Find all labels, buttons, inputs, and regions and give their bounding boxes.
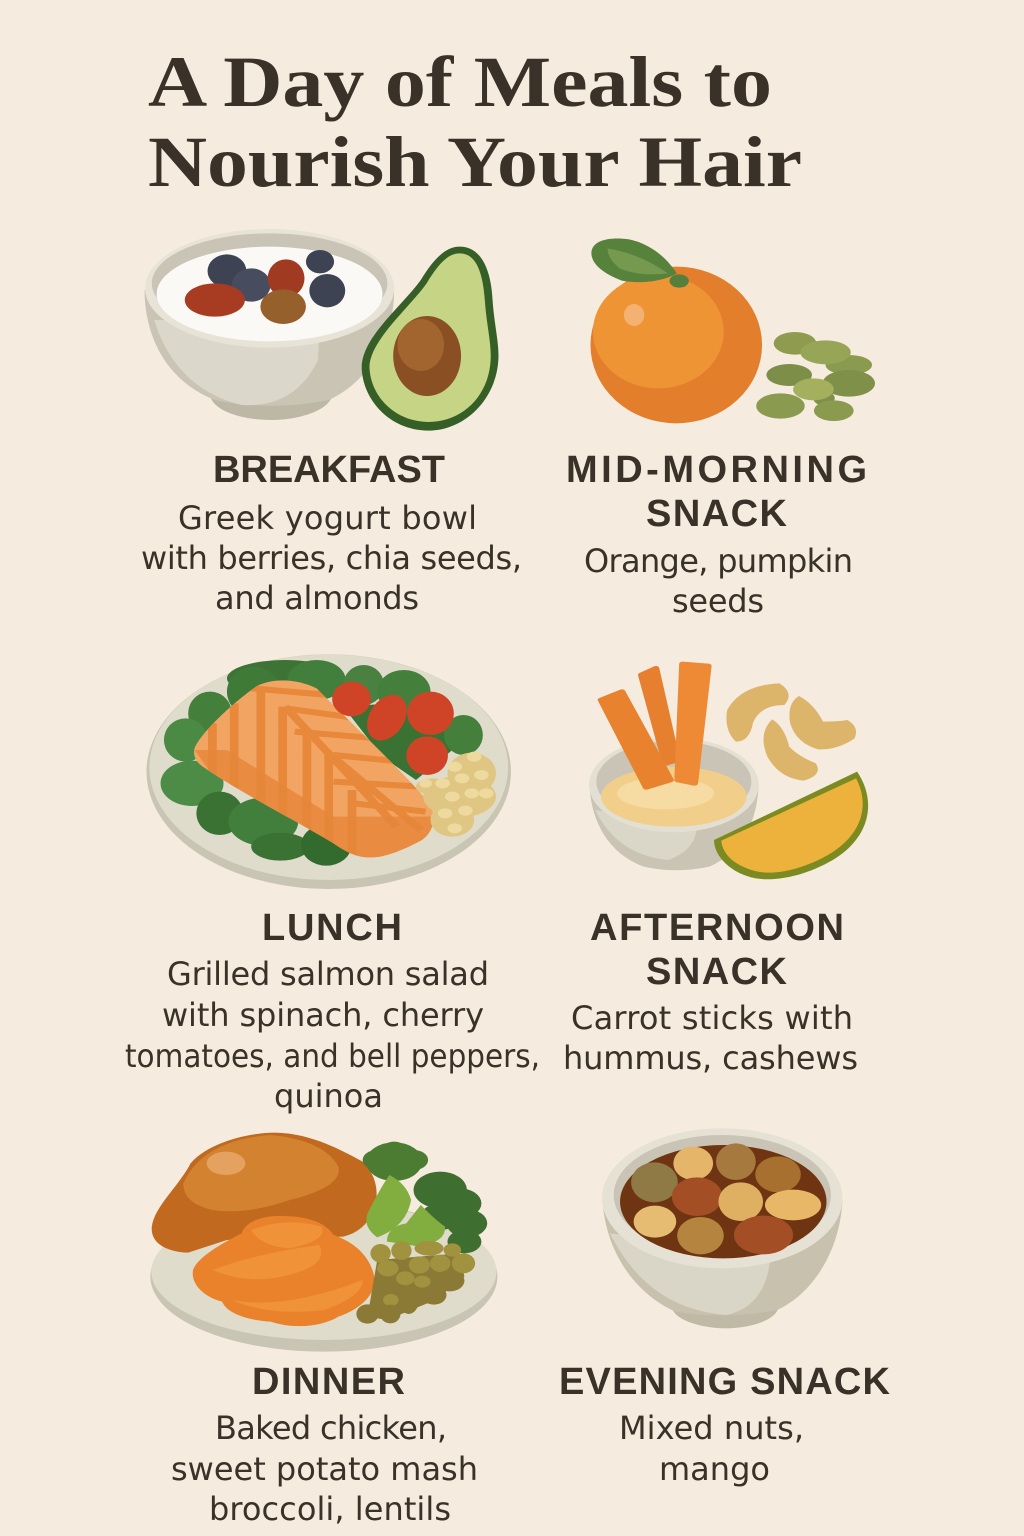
hummus bowl	[589, 738, 759, 870]
plate	[150, 1202, 497, 1352]
lentils	[356, 1241, 475, 1324]
panel: lunch text	[125, 907, 540, 1115]
tomatoes	[332, 682, 454, 775]
nut bowl	[602, 1128, 843, 1328]
panel: lunch text: LUNCH	[262, 907, 402, 949]
panel: breakfast text	[141, 449, 522, 617]
carrot sticks	[601, 664, 708, 787]
nuts	[631, 1143, 821, 1254]
panel: evening snack text: EVENING SNACK	[559, 1361, 891, 1403]
panel: afternoon snack text: SNACK	[646, 951, 788, 993]
panel: afternoon snack text: Carrot sticks with	[571, 999, 853, 1037]
panel: evening snack text: Mixed nuts,	[619, 1409, 804, 1447]
icon: salmon plate and carrots	[146, 654, 868, 889]
quinoa	[416, 752, 496, 837]
icon: yogurt bowl and avocado	[145, 229, 875, 431]
icon: chicken dinner plate and nut bowl	[150, 1128, 843, 1352]
panel: evening snack text: mango	[659, 1450, 770, 1488]
panel: afternoon snack text: AFTERNOON	[590, 907, 844, 949]
panel: breakfast text: BREAKFAST	[213, 449, 445, 491]
panel: breakfast text: and almonds	[215, 579, 419, 617]
cashews	[726, 683, 856, 781]
panel: afternoon snack text	[563, 907, 858, 1077]
title: Nourish Your Hair	[148, 122, 802, 202]
title: A Day of Meals to	[148, 42, 772, 122]
pumpkin seeds	[756, 332, 875, 421]
panel: lunch text: quinoa	[274, 1077, 383, 1115]
bowl	[145, 229, 394, 420]
panel: breakfast text: Greek yogurt bowl	[178, 499, 477, 537]
panel: dinner text: sweet potato mash	[171, 1450, 478, 1488]
panel: lunch text: with spinach, cherry	[162, 996, 484, 1034]
avocado	[362, 247, 498, 431]
salmon	[194, 680, 433, 858]
orange	[590, 238, 762, 423]
panel: mid-morning snack text	[566, 449, 867, 620]
baked chicken	[152, 1133, 377, 1253]
panel: breakfast text: with berries, chia seeds,	[141, 539, 522, 577]
panel: dinner text: DINNER	[252, 1361, 405, 1403]
panel: dinner text: Baked chicken,	[215, 1409, 447, 1447]
panel: mid-morning snack text: SNACK	[646, 493, 788, 535]
panel: evening snack text	[559, 1361, 891, 1488]
panel: dinner text: broccoli, lentils	[209, 1490, 451, 1528]
broccoli	[363, 1142, 487, 1253]
plate	[146, 654, 511, 889]
panel: afternoon snack text: hummus, cashews	[563, 1039, 858, 1077]
toppings	[185, 250, 345, 324]
mango slice	[714, 772, 868, 879]
panel: mid-morning snack text: MID-MORNING	[566, 449, 867, 491]
panel: lunch text: tomatoes, and bell peppers,	[125, 1037, 540, 1075]
title	[148, 42, 802, 202]
panel: dinner text	[171, 1361, 478, 1528]
panel: mid-morning snack text: Orange, pumpkin	[584, 542, 853, 580]
panel: mid-morning snack text: seeds	[672, 582, 764, 620]
panel: lunch text: Grilled salmon salad	[167, 955, 489, 993]
sweet potato mash	[193, 1216, 375, 1326]
spinach	[161, 660, 483, 866]
